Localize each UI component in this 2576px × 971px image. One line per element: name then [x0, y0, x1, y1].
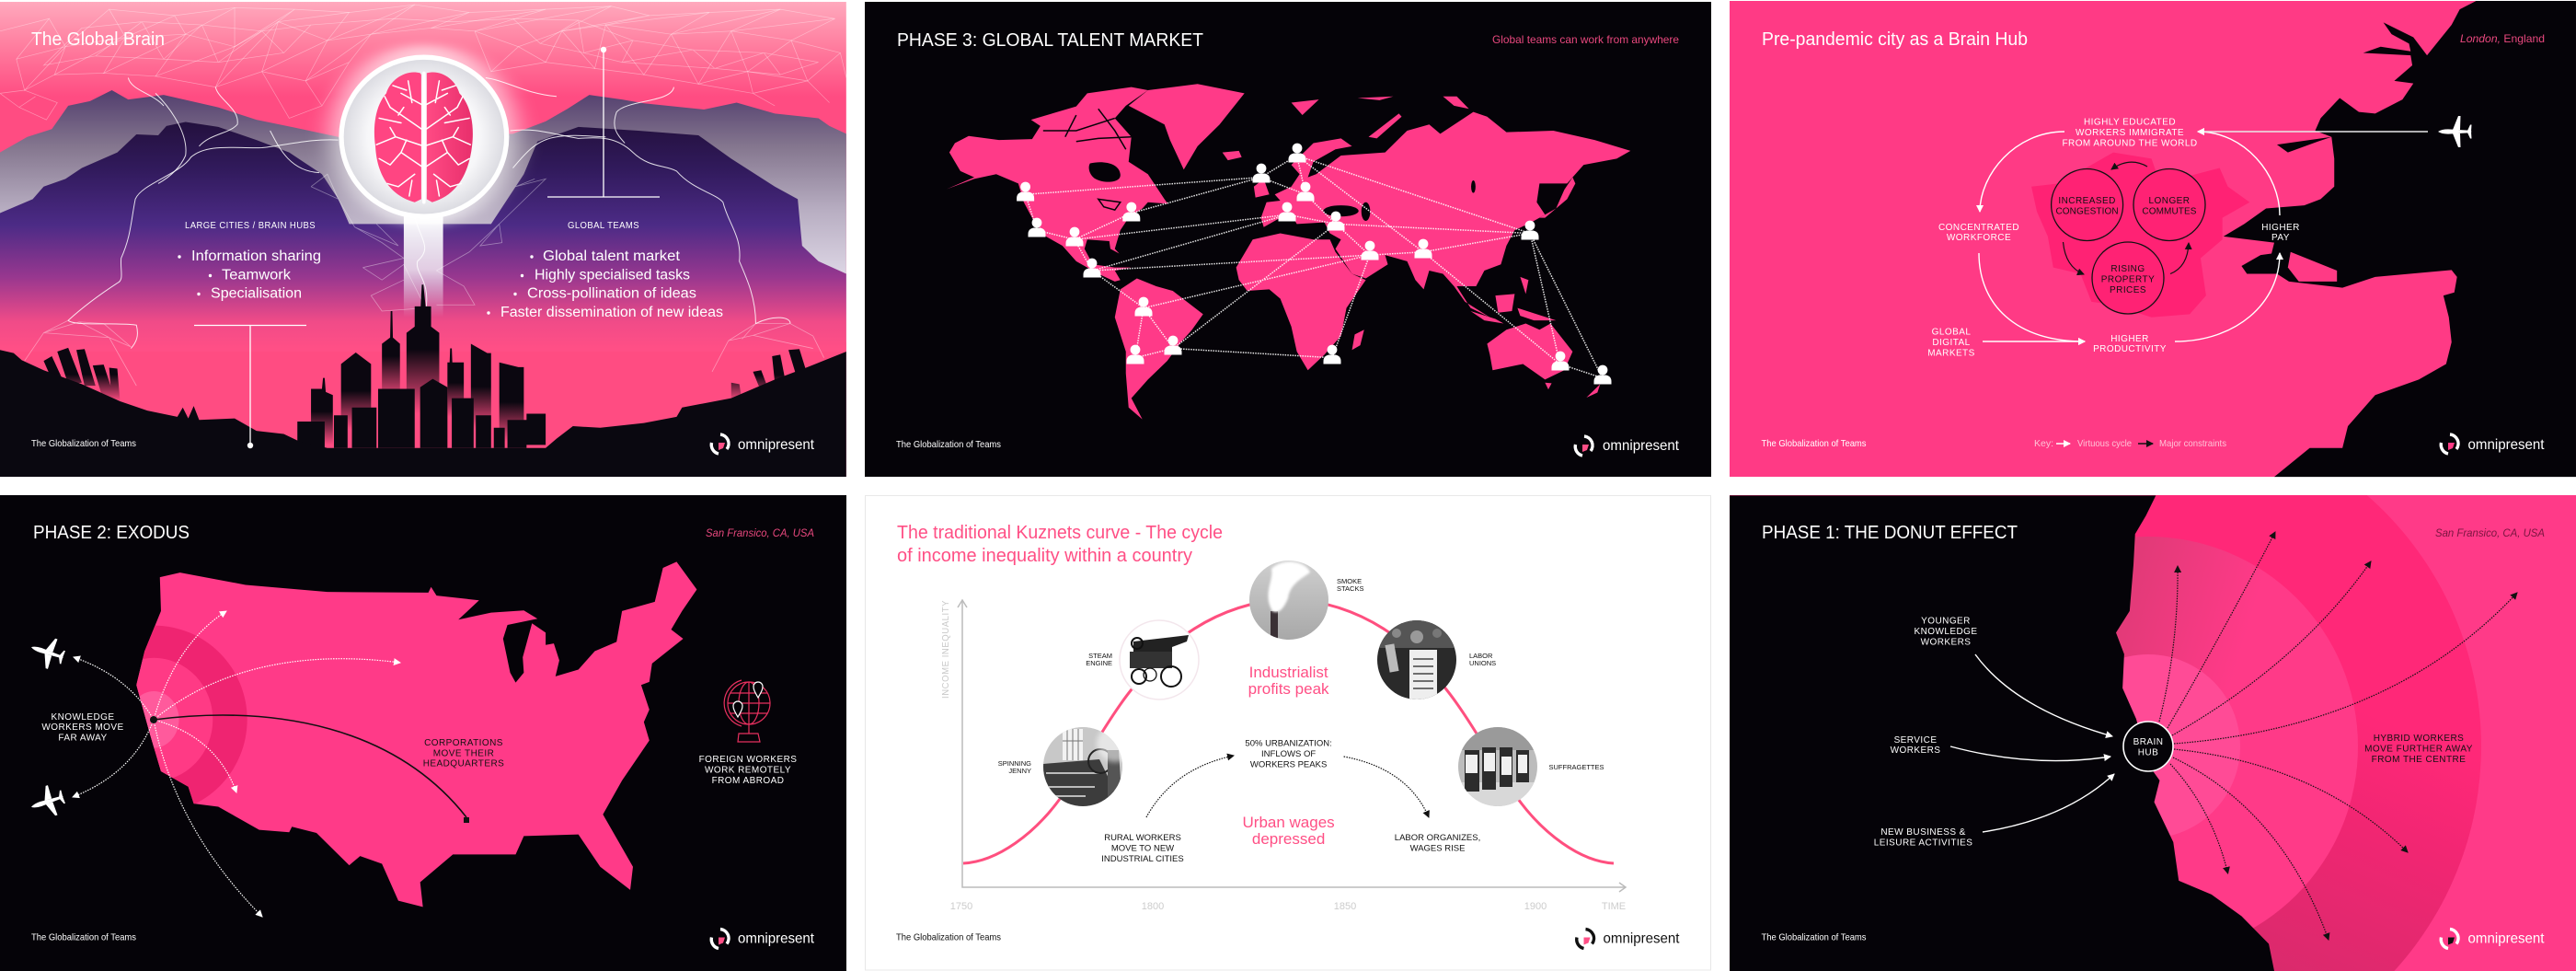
labels: cycle stages: WORKFORCE [1947, 233, 2011, 243]
logo: omnipresent [738, 931, 815, 946]
labels: photo captions: JENNY [1008, 767, 1031, 775]
logo: omnipresent [738, 437, 815, 453]
island [2288, 252, 2337, 282]
labels: inbound groups: SERVICE [1894, 735, 1937, 746]
list: global teams benefits: Faster dissemination of new ideas [500, 305, 723, 320]
label: corporations: HEADQUARTERS [423, 759, 504, 769]
labels: cycle stages: HIGHER [2110, 334, 2149, 344]
labels: photo captions: LABOR [1469, 652, 1493, 660]
labels: inbound groups: YOUNGER [1921, 617, 1971, 626]
sky background [0, 2, 846, 477]
chart axes [958, 600, 1626, 892]
circle: longer commutes: LONGER [2149, 196, 2190, 206]
legend key [2034, 438, 2226, 449]
coastline land [1730, 495, 2274, 971]
labels: photo captions: STEAM [1088, 652, 1112, 660]
axis labels: years: TIME [1602, 901, 1626, 912]
label: foreign workers: FOREIGN WORKERS [699, 755, 797, 765]
circle: rising property prices [2092, 242, 2164, 314]
labels: photo captions: SMOKE [1337, 577, 1362, 585]
label: rural workers: RURAL WORKERS [1104, 833, 1181, 843]
brain hub circle: HUB [2138, 747, 2158, 758]
labels: photo captions: STACKS [1337, 584, 1363, 593]
egg glow and beam [330, 45, 518, 225]
light beam [404, 212, 443, 318]
location: London, England [2460, 32, 2545, 45]
network connections [1026, 156, 1603, 378]
legend key: Major constraints [2159, 438, 2226, 449]
list: global teams benefits: Global talent market [543, 249, 681, 264]
photo: smoke stacks [1249, 561, 1328, 641]
labels: cycle stages: HIGHER [2261, 223, 2300, 233]
glass egg [339, 54, 509, 219]
panel: Kuznets curve [865, 495, 1711, 970]
logo [2441, 930, 2545, 948]
labels: inbound groups: WORKERS [1921, 638, 1971, 648]
circle: rising property prices: PROPERTY [2101, 274, 2155, 285]
location: San Fransico, CA, USA [2435, 526, 2545, 539]
arrows: workers move outward [2159, 532, 2517, 940]
land silhouette [2224, 1, 2576, 477]
subtitle: Global teams can work from anywhere [1492, 33, 1679, 46]
photo: labor unions [1377, 620, 1456, 699]
label: rural workers: MOVE TO NEW [1111, 843, 1174, 854]
labels: inbound groups: WORKERS [1891, 746, 1940, 756]
arrows: virtuous cycle [1979, 132, 2428, 341]
title: The Global Brain [31, 29, 165, 50]
labels: photo captions [998, 577, 1604, 775]
panel background [865, 495, 1711, 970]
circle: rising property prices: RISING [2110, 264, 2145, 274]
title: of income inequality within a country [897, 546, 1192, 566]
label: knowledge workers: FAR AWAY [58, 733, 108, 744]
list: global teams benefits: Highly specialised tasks [535, 267, 690, 283]
icon: brain [374, 72, 473, 202]
world map [947, 84, 1630, 420]
axis labels: years: 1750 [950, 901, 972, 912]
logo: omnipresent [2467, 931, 2545, 946]
label: corporations: MOVE THEIR [433, 749, 494, 758]
logo [711, 434, 815, 454]
back mountain range [0, 90, 846, 342]
arrows: knowledge workers move [73, 611, 400, 917]
list: large cities benefits: Teamwork [222, 267, 291, 283]
labels: cycle stages: MARKETS [1927, 349, 1975, 359]
footer: The Globalization of Teams [1761, 438, 1866, 449]
photo: suffragettes [1458, 727, 1537, 806]
labels: cycle stages: HIGHLY EDUCATED [2084, 118, 2176, 127]
labels: cycle stages: FROM AROUND THE WORLD [2062, 138, 2198, 149]
labels: photo captions: SPINNING [998, 759, 1031, 768]
circle: rising property prices: PRICES [2110, 285, 2146, 295]
label: knowledge workers: WORKERS MOVE [41, 722, 124, 733]
title: PHASE 2: EXODUS [33, 523, 190, 543]
front mountain range [0, 121, 846, 352]
callout: industrialist profits peak: Industrialist [1249, 664, 1328, 681]
network mesh: top [0, 5, 846, 120]
axis labels: years: 1850 [1334, 901, 1356, 912]
labels: cycle stages: PRODUCTIVITY [2093, 344, 2167, 354]
city skyline: solid towers [297, 379, 546, 448]
labels: cycle stages: GLOBAL [1932, 328, 1971, 338]
network mesh: lower clusters [25, 174, 824, 386]
map: United States [136, 561, 697, 907]
logo: omnipresent [2467, 437, 2545, 453]
brain hub circle [2123, 722, 2173, 771]
axis label: income inequality: INCOME INEQUALITY [941, 600, 951, 699]
labels: cycle stages [1927, 118, 2300, 359]
footer: The Globalization of Teams [896, 931, 1001, 942]
label: hybrid workers: MOVE FURTHER AWAY [2364, 744, 2473, 755]
label: urbanization: 50% URBANIZATION: [1245, 738, 1332, 749]
legend key: Virtuous cycle [2077, 438, 2132, 449]
labels: cycle stages: DIGITAL [1932, 338, 1971, 348]
logo [2441, 434, 2545, 454]
circle: increased congestion: INCREASED [2058, 196, 2116, 206]
panel: Phase 2 Exodus [0, 495, 846, 971]
circle: increased congestion [2052, 169, 2123, 241]
concentric urban rings [136, 626, 247, 804]
axis labels: years [950, 901, 1626, 912]
footer: The Globalization of Teams [896, 439, 1001, 450]
title: PHASE 1: THE DONUT EFFECT [1762, 523, 2018, 543]
map: coastline and city [2031, 1, 2576, 477]
label: hybrid workers: HYBRID WORKERS [2374, 734, 2464, 744]
labels: cycle stages: CONCENTRATED [1938, 223, 2019, 233]
panel background [865, 2, 1711, 477]
labels: inbound groups: NEW BUSINESS & [1880, 827, 1966, 838]
circle: longer commutes: COMMUTES [2142, 206, 2197, 217]
panel: Phase 3 Global Talent Market [865, 2, 1711, 477]
connector: right sky pin [547, 47, 660, 197]
icon: airplane [2438, 116, 2472, 147]
panel background [1730, 1, 2576, 477]
photo: spinning jenny [1043, 727, 1122, 806]
label: urbanization: WORKERS PEAKS [1250, 760, 1327, 769]
arrows: urbanization cycle [1146, 756, 1429, 817]
panel: Pre-pandemic city as a Brain Hub [1730, 1, 2576, 477]
legend key: Key: [2034, 438, 2053, 449]
labels: inbound groups: LEISURE ACTIVITIES [1874, 838, 1972, 849]
label: foreign workers: WORK REMOTELY [705, 766, 791, 776]
labels: photo captions: UNIONS [1469, 659, 1496, 667]
logo: omnipresent [1603, 438, 1680, 454]
arrows: major constraints [2063, 162, 2189, 274]
heading: global teams: GLOBAL TEAMS [568, 221, 639, 231]
logo [711, 930, 815, 948]
callout: urban wages depressed: Urban wages [1243, 814, 1335, 831]
ground silhouette [0, 350, 846, 477]
brain hub circle: BRAIN [2133, 737, 2163, 747]
footer: The Globalization of Teams [31, 931, 136, 942]
label: urbanization: INFLOWS OF [1261, 749, 1316, 759]
footer: The Globalization of Teams [31, 438, 136, 449]
icon: globe with pins [724, 680, 770, 742]
connector: left ground pin [194, 326, 306, 448]
list: large cities benefits: Specialisation [211, 285, 302, 302]
photo: steam engine [1120, 620, 1199, 699]
city skyline: faded towers [43, 284, 807, 445]
list: global teams benefits: Cross-pollination of ideas [527, 285, 696, 302]
label: labor organizes: LABOR ORGANIZES, [1395, 833, 1480, 843]
label: labor organizes: WAGES RISE [1410, 843, 1465, 854]
circle: longer commutes [2133, 169, 2205, 241]
label: hybrid workers: FROM THE CENTRE [2372, 755, 2466, 765]
labels: photo captions: SUFFRAGETTES [1549, 763, 1604, 771]
location: San Fransico, CA, USA [706, 526, 814, 539]
circle: increased congestion: CONGESTION [2055, 206, 2119, 217]
list: global teams benefits [487, 249, 723, 320]
labels: inbound groups [1874, 617, 1978, 849]
list: large cities benefits: Information sharing [191, 249, 321, 264]
icon: person markers [1017, 144, 1612, 385]
label: rural workers: INDUSTRIAL CITIES [1101, 854, 1184, 864]
labels: photo captions: ENGINE [1086, 659, 1112, 667]
panel background [1730, 495, 2576, 971]
icon: airplane bottom [27, 781, 68, 822]
Kuznets curve line [963, 598, 1614, 863]
callout: urban wages depressed: depressed [1252, 830, 1325, 848]
list: large cities benefits [178, 249, 321, 302]
labels: cycle stages: WORKERS IMMIGRATE [2076, 128, 2184, 138]
land [136, 561, 696, 907]
panel background [0, 495, 846, 971]
heading: large cities: LARGE CITIES / BRAIN HUBS [185, 221, 316, 231]
illustration: sky, mountains, network and skyline [0, 2, 846, 477]
label: knowledge workers: KNOWLEDGE [51, 712, 115, 722]
arrow: corporations move [150, 715, 469, 823]
panel: Phase 1 Donut Effect [1730, 495, 2576, 971]
logo: omnipresent [1603, 931, 1680, 946]
axis labels: years: 1800 [1142, 901, 1164, 912]
labels: inbound groups: KNOWLEDGE [1914, 627, 1978, 637]
axis labels: years: 1900 [1524, 901, 1547, 912]
glowing wires [68, 77, 790, 349]
donut rings [1730, 495, 2481, 971]
label: corporations: CORPORATIONS [424, 738, 503, 748]
greater London shape [2031, 153, 2249, 318]
logo [1577, 930, 1680, 948]
panel: The Global Brain [0, 2, 846, 477]
title: Pre-pandemic city as a Brain Hub [1762, 29, 2028, 50]
title: PHASE 3: GLOBAL TALENT MARKET [897, 30, 1203, 51]
callout: industrialist profits peak: profits peak [1248, 680, 1329, 698]
arrows: workers move inward [1950, 654, 2114, 832]
footer: The Globalization of Teams [1761, 931, 1866, 942]
logo [1575, 436, 1680, 456]
icon: airplane top [27, 632, 68, 673]
title: The traditional Kuznets curve - The cycle [897, 523, 1223, 543]
labels: cycle stages: PAY [2271, 233, 2290, 243]
label: foreign workers: FROM ABROAD [712, 776, 784, 786]
